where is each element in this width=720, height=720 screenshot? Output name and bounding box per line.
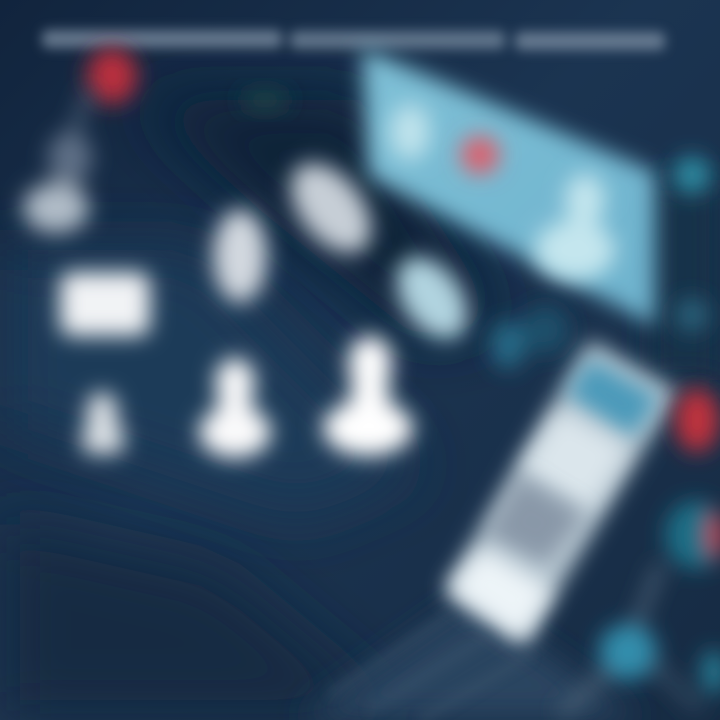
icon: red alert dot <box>461 136 499 174</box>
network nodes bottom right <box>560 501 720 715</box>
icon: light blue tilted capsule <box>382 244 482 352</box>
phone list area <box>485 475 585 565</box>
icon: screen right person <box>535 174 615 280</box>
icon: tilted white capsule <box>275 148 387 268</box>
title <box>42 30 665 50</box>
icon: screen left person <box>390 104 430 160</box>
panel: tilted light blue screen <box>362 48 655 326</box>
phone <box>445 340 678 645</box>
icon: teal dots right side <box>491 156 711 369</box>
icon: medium white person <box>199 358 271 458</box>
phone upper text area <box>520 410 628 510</box>
icon: large white person <box>323 336 413 456</box>
icon: red alert at phone corner <box>675 388 719 452</box>
icon: small white person <box>82 392 124 454</box>
phone bottom button <box>448 548 552 640</box>
icon: vertical white capsule <box>213 209 267 303</box>
icon: white rectangle card <box>60 272 150 336</box>
icon: grey person top left <box>23 90 92 233</box>
phone header <box>566 358 660 438</box>
icon: red marker top left <box>87 48 137 104</box>
keyboard texture bottom <box>330 615 530 720</box>
icon: dim green mark <box>241 90 289 110</box>
